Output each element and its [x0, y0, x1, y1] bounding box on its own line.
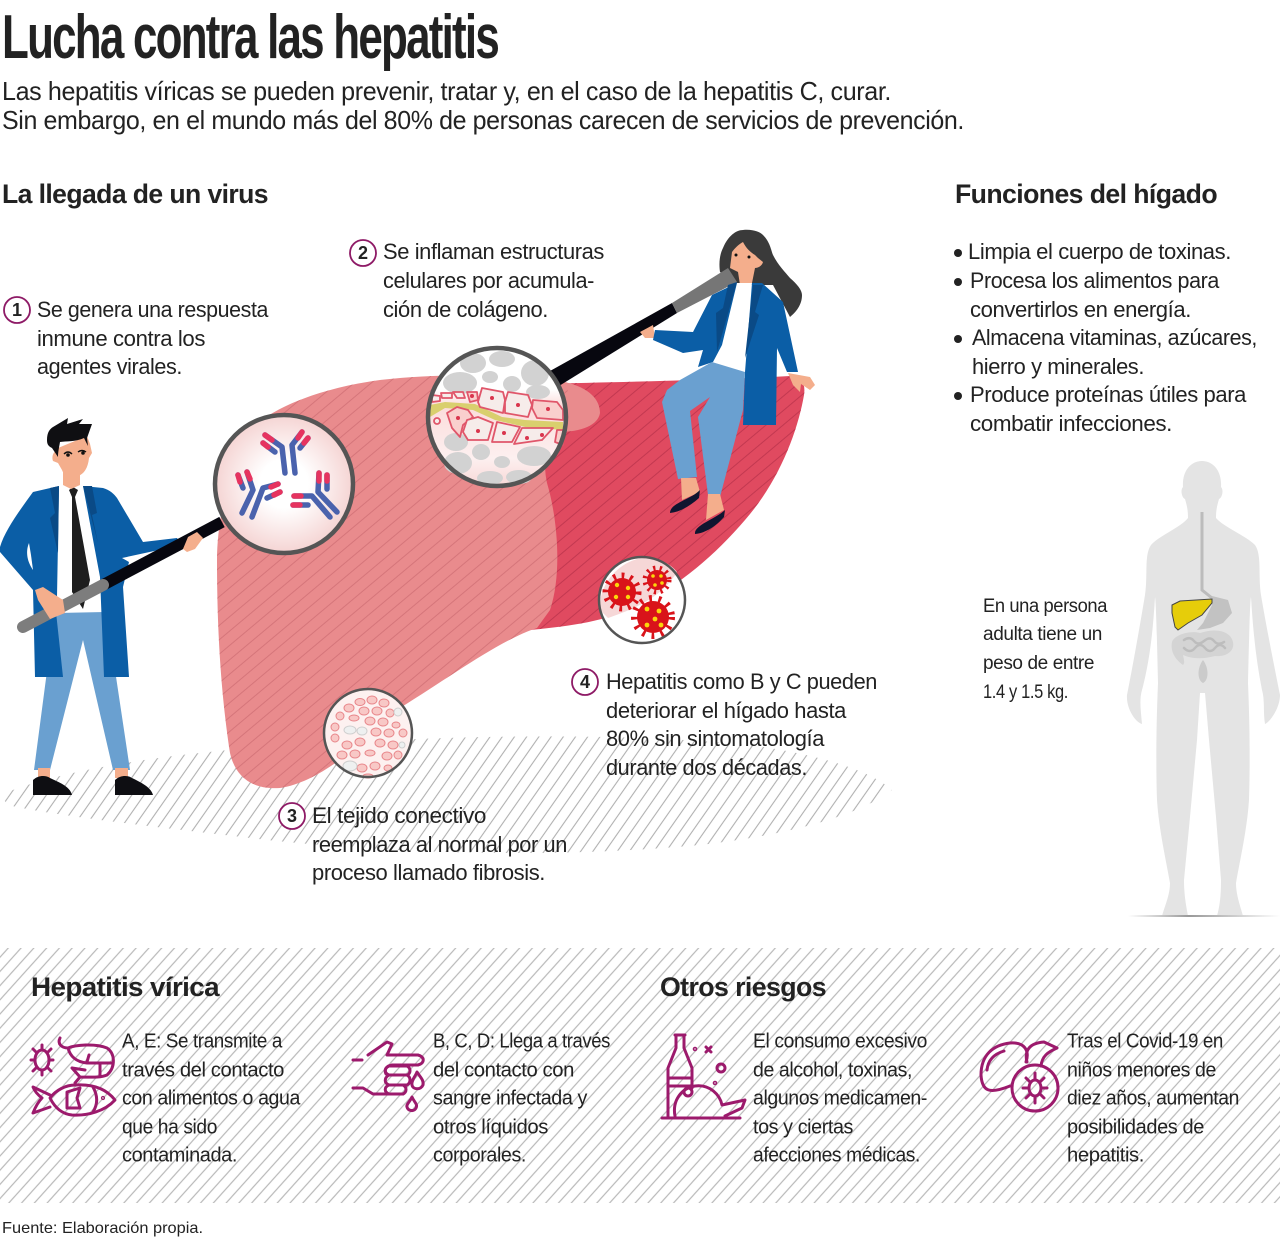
- liver left lobe: [217, 375, 600, 788]
- step 1: 1: [12, 300, 22, 320]
- esophagus: [1202, 512, 1212, 598]
- step 4: [572, 669, 877, 780]
- silhouette: [1127, 461, 1280, 916]
- text: virus B, C, D: sangre infectada y: [433, 1088, 587, 1110]
- shirt: [57, 484, 105, 613]
- text: virus B, C, D: otros líquidos: [433, 1116, 548, 1138]
- liver weight note: En una persona: [983, 596, 1108, 617]
- step 4: 80% sin sintomatología: [606, 726, 825, 751]
- text: virus B, C, D: corporales.: [433, 1144, 526, 1166]
- functions list: Procesa los alimentos para: [970, 268, 1220, 293]
- text: other risks alcohol: tos y ciertas: [753, 1116, 853, 1138]
- functions list: Limpia el cuerpo de toxinas.: [968, 239, 1231, 264]
- functions list: Almacena vitaminas, azúcares,: [972, 325, 1257, 350]
- intestines: [1172, 630, 1233, 665]
- text: other risks covid: Tras el Covid-19 en: [1067, 1030, 1223, 1052]
- magnifier handle: [550, 303, 677, 386]
- coat gap and lapels: [27, 543, 33, 570]
- intro text: [2, 76, 964, 135]
- magnifier 4: viruses: [599, 557, 685, 643]
- antibody right: [293, 473, 337, 517]
- step 1: Se genera una respuesta: [37, 297, 269, 322]
- step 1: [4, 297, 269, 379]
- hair: [47, 418, 92, 457]
- functions list: hierro y minerales.: [972, 354, 1144, 379]
- ground hatch: [0, 736, 892, 853]
- text: other risks covid: posibilidades de: [1067, 1116, 1204, 1138]
- trousers: [34, 610, 130, 770]
- red outlined cells: [432, 388, 563, 445]
- tie: [69, 487, 90, 609]
- text: other risks alcohol: afecciones médicas.: [753, 1144, 920, 1166]
- ankles and shoes: [38, 768, 128, 778]
- icon: hand and blood drops: [353, 1042, 423, 1111]
- step 3: [279, 803, 567, 885]
- virus top right: [646, 569, 668, 591]
- magnifier handle: [103, 522, 222, 585]
- step 1: inmune contra los: [37, 326, 205, 351]
- shirt: [713, 283, 752, 372]
- legs and shoes: [681, 478, 724, 520]
- human body with liver: [1127, 461, 1280, 917]
- text: virus A, E: con alimentos o agua: [122, 1088, 301, 1110]
- step 4: 4: [580, 672, 590, 692]
- woman scientist: [550, 230, 815, 534]
- ground shadow: [1128, 915, 1280, 917]
- step 3: El tejido conectivo: [312, 803, 486, 828]
- step 4: Hepatitis como B y C pueden: [606, 669, 877, 694]
- text: other risks alcohol: [753, 1030, 927, 1166]
- man scientist: [0, 418, 222, 795]
- text: virus A, E: que ha sido: [122, 1116, 217, 1138]
- liver: [1172, 599, 1212, 630]
- bottom panel: [0, 948, 1280, 1203]
- text: virus A, E: contaminada.: [122, 1144, 237, 1166]
- hand on liver: [788, 373, 815, 392]
- step 2: ción de colágeno.: [383, 297, 548, 322]
- icon: virus, shrimp and fish: [31, 1038, 115, 1115]
- step 2: 2: [358, 243, 368, 263]
- step 3: reemplaza al normal por un: [312, 832, 567, 857]
- text: virus B, C, D: del contacto con: [433, 1060, 574, 1082]
- step 4: durante dos décadas.: [606, 755, 807, 780]
- yellow collagen band: [430, 402, 563, 430]
- text: other risks covid: niños menores de: [1067, 1060, 1216, 1082]
- magnifier 2: collagen cells: [428, 348, 566, 486]
- step 1: agentes virales.: [37, 354, 182, 379]
- heading: la llegada de un virus: La llegada de un virus: [2, 179, 268, 209]
- face: [730, 242, 763, 286]
- functions list: Produce proteínas útiles para: [970, 382, 1247, 407]
- text: virus A, E: A, E: Se transmite a: [122, 1030, 283, 1052]
- grey cells: [443, 351, 551, 485]
- title: Lucha contra las hepatitis: [2, 3, 498, 72]
- step 2: Se inflaman estructuras: [383, 239, 604, 264]
- hands: [35, 587, 65, 619]
- heading: funciones del hígado: Funciones del hígado: [955, 179, 1217, 209]
- step 3: 3: [287, 806, 297, 826]
- liver weight note: adulta tiene un: [983, 624, 1102, 645]
- text: other risks alcohol: El consumo excesivo: [753, 1030, 927, 1052]
- text: virus B, C, D: B, C, D: Llega a través: [433, 1030, 610, 1052]
- virus bottom: [636, 600, 670, 634]
- liver illustration: [217, 375, 804, 788]
- intro text: Las hepatitis víricas se pueden prevenir, tratar y, en el caso de la hepatitis C, curar.: [2, 76, 891, 106]
- step 4: deteriorar el hígado hasta: [606, 698, 847, 723]
- icon: liver with virus: [981, 1042, 1058, 1111]
- text: virus A, E: través del contacto: [122, 1060, 284, 1082]
- heading: hepatitis vírica: Hepatitis vírica: [31, 972, 221, 1002]
- coat: [653, 283, 798, 425]
- functions list: [954, 239, 1257, 436]
- neck and face: [63, 470, 80, 489]
- text: other risks alcohol: de alcohol, toxinas,: [753, 1060, 912, 1082]
- virus left: [607, 577, 637, 607]
- text: other risks covid: hepatitis.: [1067, 1144, 1144, 1166]
- liver right lobe: [530, 376, 804, 630]
- liver weight note: 1.4 y 1.5 kg.: [983, 682, 1068, 703]
- functions list: convertirlos en energía.: [970, 297, 1191, 322]
- liver weight note: [983, 596, 1108, 703]
- text: other risks covid: diez años, aumentan: [1067, 1088, 1239, 1110]
- text: virus A, E: [122, 1030, 301, 1166]
- antibody left: [238, 472, 280, 517]
- magnifier 1: antibodies: [215, 415, 353, 553]
- text: other risks alcohol: algunos medicamen-: [753, 1088, 927, 1110]
- step 2: [350, 239, 604, 322]
- antibody top: [263, 432, 308, 473]
- stomach: [1197, 596, 1232, 630]
- heading: otros riesgos: Otros riesgos: [660, 972, 826, 1002]
- coat: [0, 486, 182, 677]
- trousers: [662, 362, 745, 497]
- hair: [719, 230, 802, 317]
- source: Fuente: Elaboración propia.: [2, 1220, 203, 1237]
- step 2: celulares por acumula-: [383, 268, 594, 293]
- text: virus B, C, D: [433, 1030, 610, 1166]
- liver weight note: peso de entre: [983, 653, 1094, 674]
- hand on handle: [640, 325, 655, 338]
- intro text: Sin embargo, en el mundo más del 80% de personas carecen de servicios de prevención.: [2, 105, 964, 135]
- icon: bottle and sick liver: [662, 1035, 745, 1118]
- magnifier 3: fibrosis tissue: [324, 689, 412, 778]
- step 3: proceso llamado fibrosis.: [312, 860, 545, 885]
- text: other risks covid: [1067, 1030, 1239, 1166]
- functions list: combatir infecciones.: [970, 411, 1172, 436]
